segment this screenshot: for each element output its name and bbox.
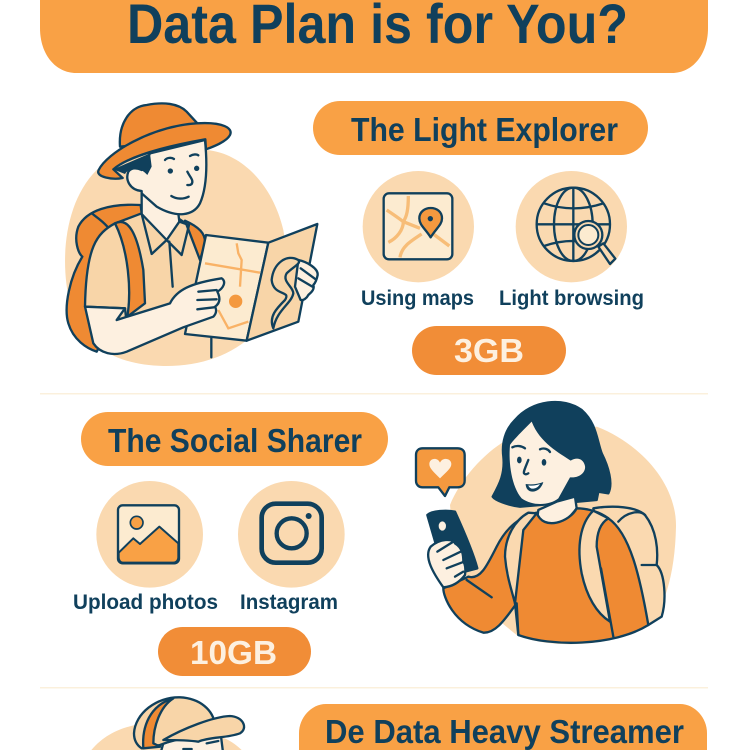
pill: the social sharer — [81, 412, 388, 466]
panel: the light explorer — [65, 101, 648, 375]
label: upload photos: Upload photos — [73, 591, 218, 614]
panel: the social sharer — [73, 402, 676, 676]
label: instagram: Instagram — [240, 591, 338, 614]
header banner — [40, 0, 708, 73]
icon: instagram — [238, 481, 345, 588]
data badge: 3GB: 3GB — [454, 332, 524, 369]
map — [185, 235, 268, 341]
pill: de data heavy streamer: De Data Heavy Streamer — [325, 713, 684, 750]
icon: light browsing — [516, 171, 627, 282]
label: light browsing: Light browsing — [499, 287, 644, 310]
data badge: 10GB: 10GB — [190, 634, 277, 671]
pill: the light explorer — [313, 101, 648, 155]
icon: upload photos — [96, 481, 203, 588]
panel: the data heavy streamer — [90, 697, 707, 750]
pill: the light explorer: The Light Explorer — [351, 111, 618, 148]
data badge: 10GB — [158, 627, 311, 676]
illustration: streamer with cap — [90, 697, 244, 750]
data badge: 3GB — [412, 326, 566, 375]
illustration: woman with phone — [416, 402, 676, 644]
icon: using maps — [363, 171, 474, 282]
icon: heart speech bubble — [416, 448, 465, 496]
label: using maps: Using maps — [361, 287, 474, 310]
illustration: explorer with map — [65, 103, 318, 366]
pill: the social sharer: The Social Sharer — [108, 422, 362, 459]
